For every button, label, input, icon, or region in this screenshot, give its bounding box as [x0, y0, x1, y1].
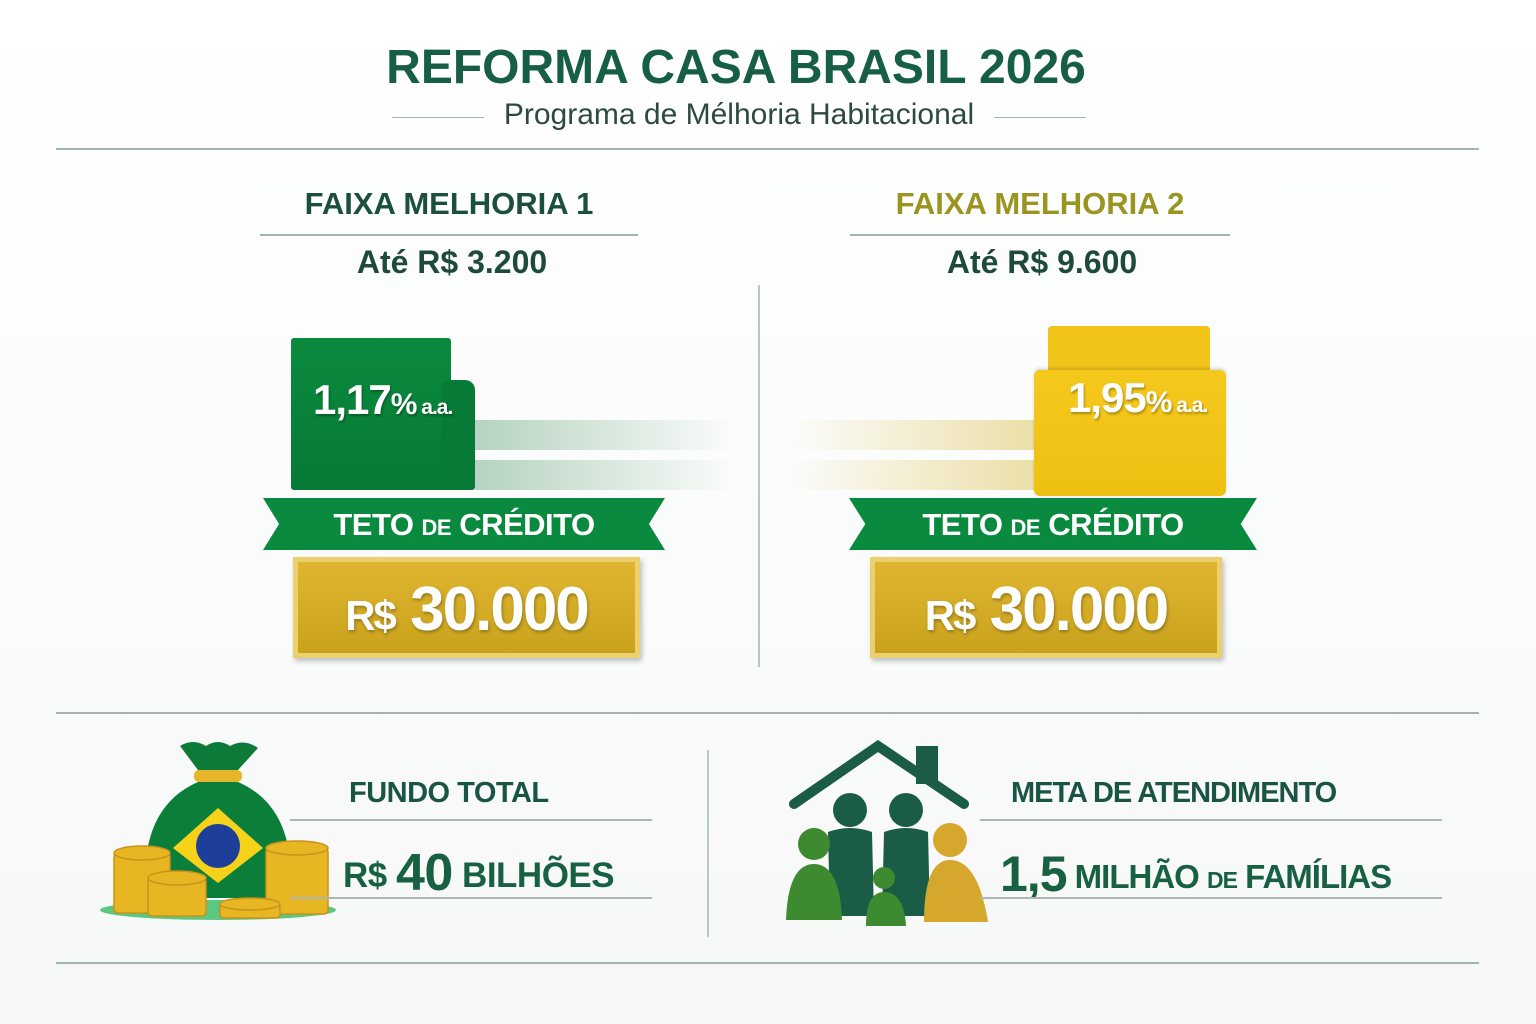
icon: house with family [786, 740, 988, 926]
stripes 1 [475, 420, 735, 450]
ribbon 1 [263, 498, 665, 550]
stat: fund total: R$ 40 BILHÕES [343, 844, 614, 902]
credit value 1 [293, 557, 640, 658]
credit value 2 [870, 557, 1222, 658]
credit value 1: R$ 30.000 [345, 575, 588, 644]
stat: fund total [290, 777, 652, 902]
panel: faixa 2 [814, 186, 1257, 664]
rate block 2 [1033, 326, 1227, 496]
panel: faixa 1 [260, 186, 704, 664]
stat: target families: META DE ATENDIMENTO [1011, 777, 1336, 809]
ribbon 2: TETO DE CRÉDITO [922, 507, 1184, 542]
ribbon 2 [849, 498, 1257, 550]
divider vertical [758, 285, 760, 667]
heading faixa 1: FAIXA MELHORIA 1 [305, 186, 593, 221]
rate block 1 [291, 338, 475, 490]
stat: target families: 1,5 MILHÃO DE FAMÍLIAS [1000, 846, 1391, 902]
title: REFORMA CASA BRASIL 2026 [386, 41, 1086, 94]
icon: money bag with coins [100, 742, 336, 920]
stripes 2 [790, 420, 1034, 450]
income limit 2: Até R$ 9.600 [947, 244, 1137, 280]
rate block 1: 1,17% a.a. [313, 376, 452, 423]
credit value 2: R$ 30.000 [925, 575, 1167, 644]
heading faixa 2: FAIXA MELHORIA 2 [896, 186, 1184, 221]
subtitle: Programa de Mélhoria Habitacional [504, 98, 974, 131]
stat: target families [980, 777, 1442, 902]
rate block 2: 1,95% a.a. [1068, 374, 1207, 421]
stat: fund total: FUNDO TOTAL [349, 777, 549, 809]
income limit 1: Até R$ 3.200 [357, 244, 547, 280]
ribbon 1: TETO DE CRÉDITO [333, 507, 595, 542]
